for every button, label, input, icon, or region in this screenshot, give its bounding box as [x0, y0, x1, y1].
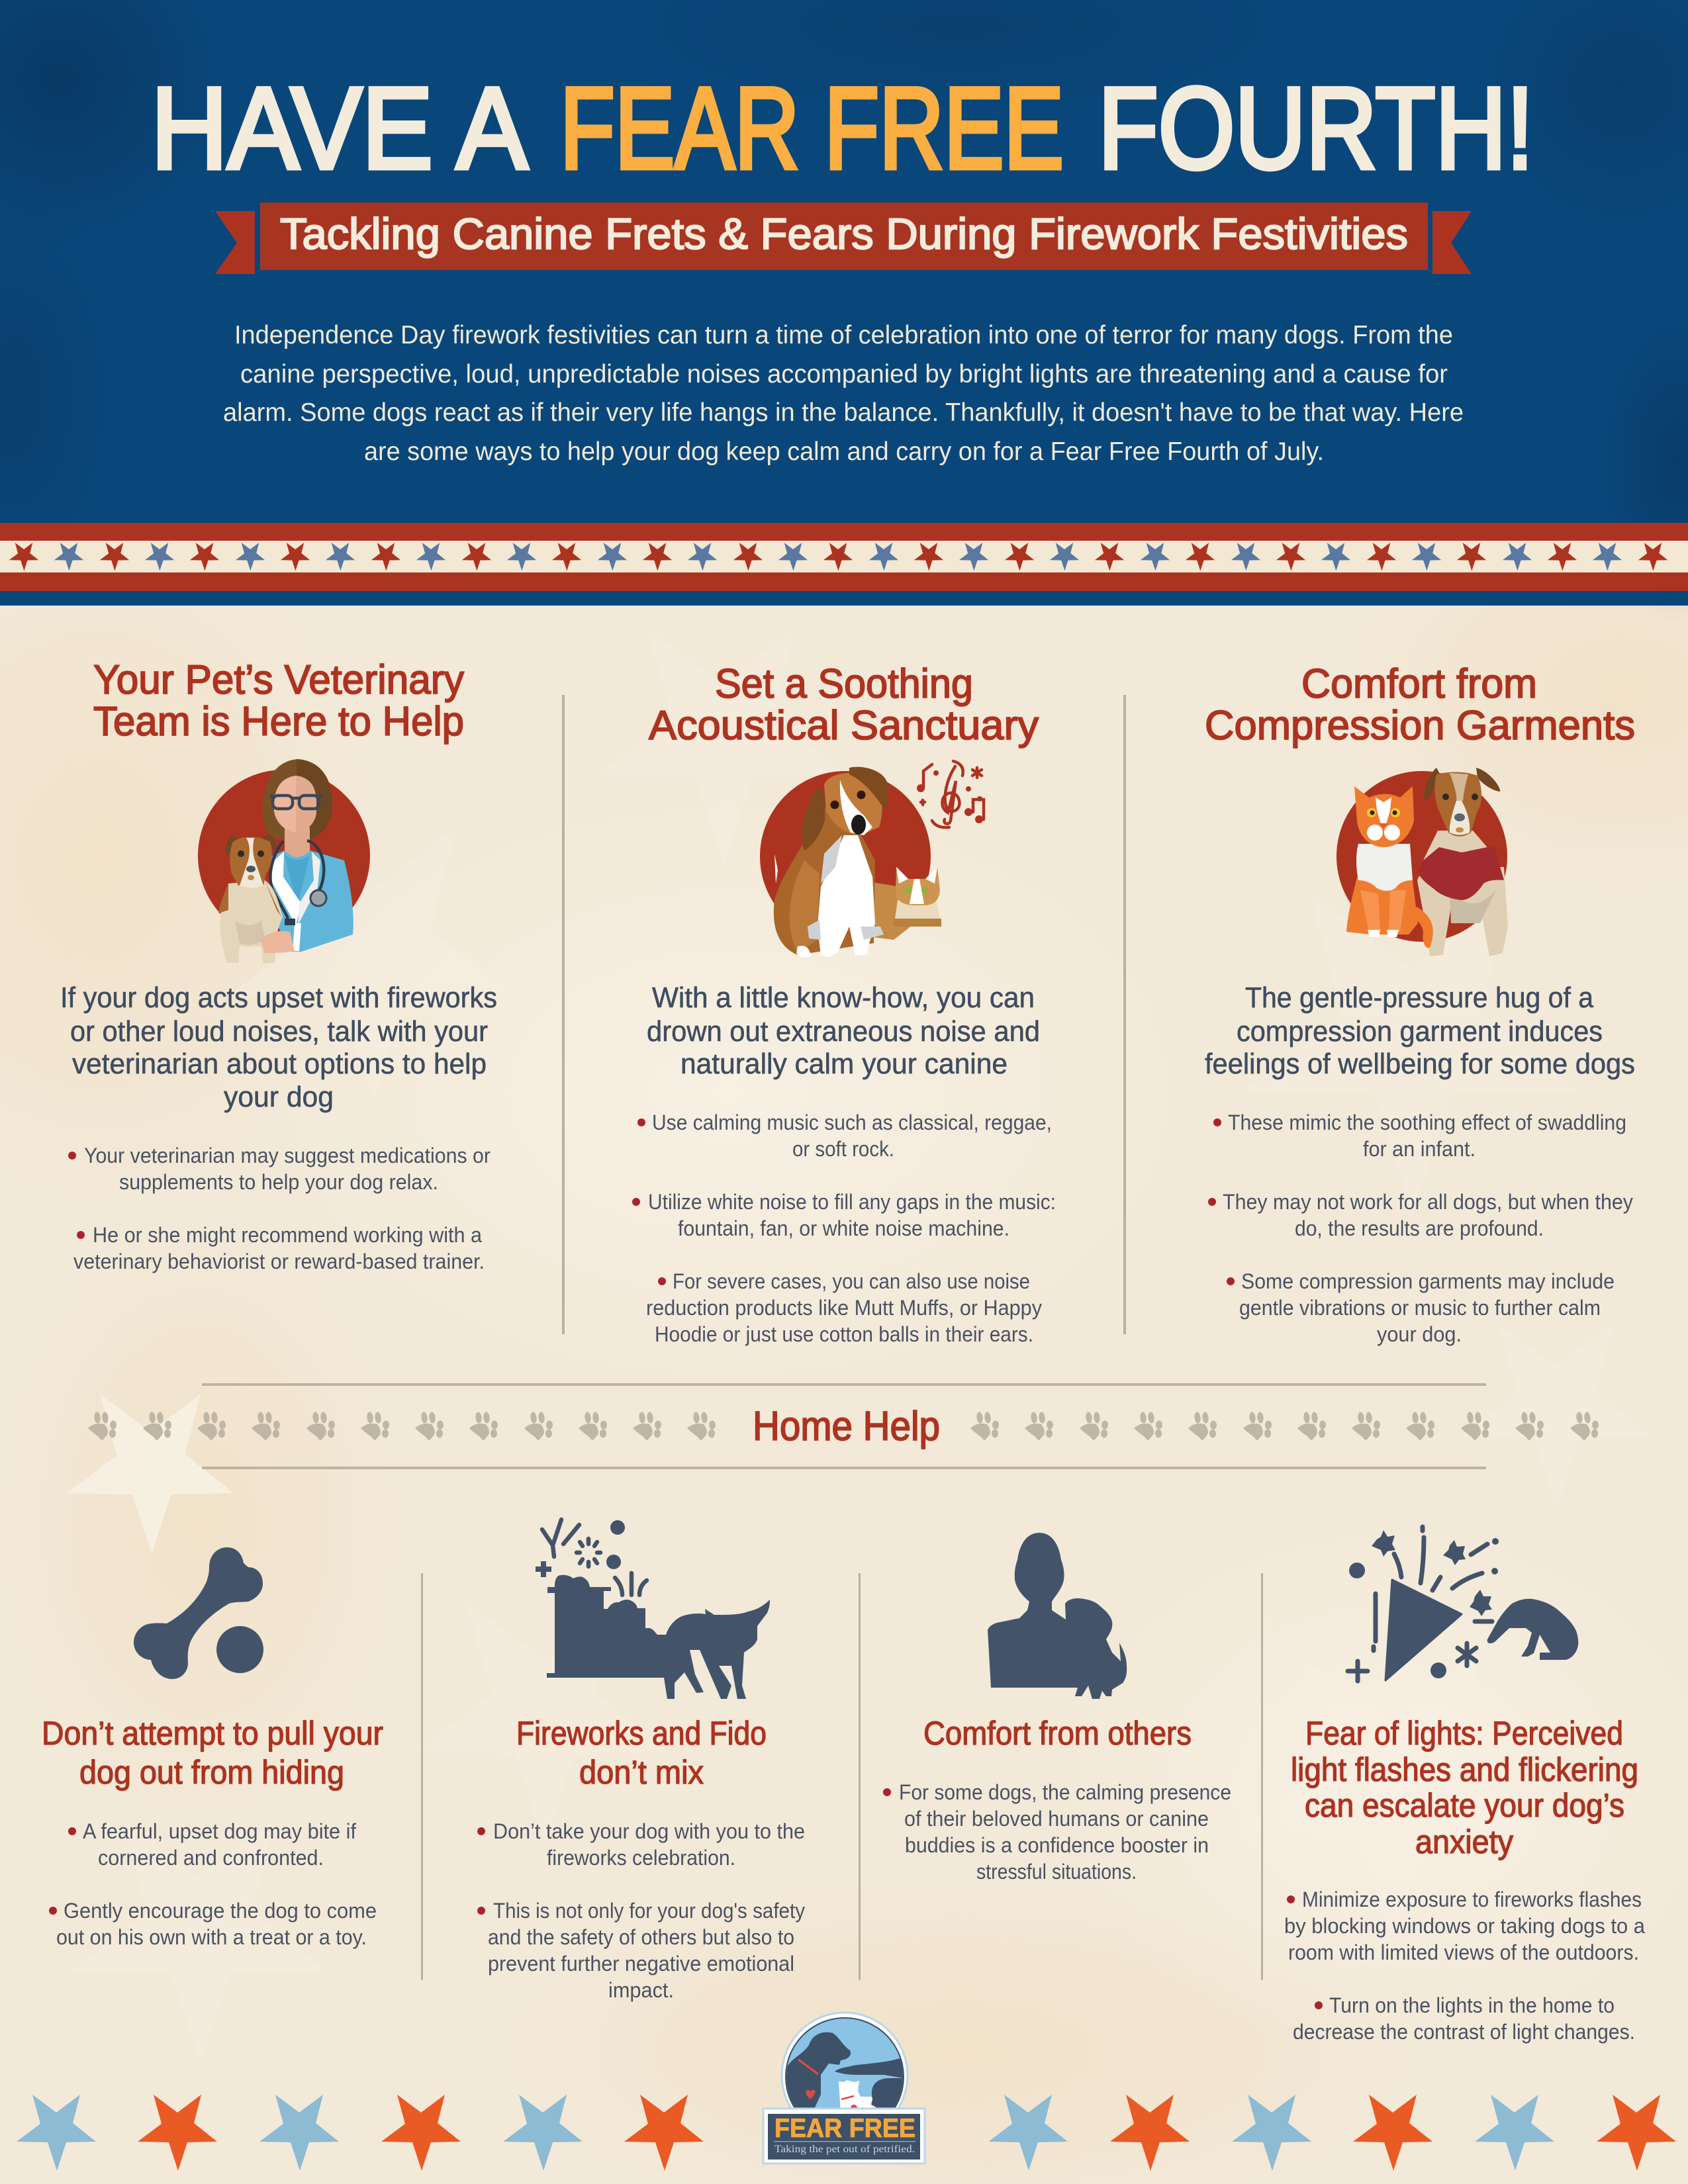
- bullet list: room with limited views of the outdoors.: [1288, 1940, 1639, 1964]
- heading: anxiety: [1415, 1823, 1513, 1860]
- bullet list: Minimize exposure to fireworks flashes: [1302, 1888, 1642, 1911]
- icon: party popper and crouching dog: [1348, 1527, 1578, 1681]
- bullet list: stressful situations.: [976, 1860, 1137, 1884]
- bullet list: [68, 1144, 491, 1273]
- bullet list: For some dogs, the calming presence: [899, 1780, 1231, 1804]
- subheading: The gentle-pressure hug of a: [1245, 981, 1593, 1014]
- bullet list: Turn on the lights in the home to: [1329, 1993, 1615, 2017]
- bullet list: A fearful, upset dog may bite if: [83, 1819, 356, 1843]
- divider: [859, 1573, 861, 1980]
- panel: comfort from others: [883, 1533, 1231, 1884]
- bullet list: veterinary behaviorist or reward-based trainer.: [73, 1250, 485, 1273]
- subtitle ribbon: Tackling Canine Frets & Fears During Firework Festivities: [280, 209, 1408, 258]
- divider: [1261, 1573, 1263, 1980]
- icon: fireworks and dog: [536, 1520, 770, 1699]
- bullet list: fireworks celebration.: [547, 1846, 735, 1870]
- heading: Team is Here to Help: [93, 699, 464, 745]
- divider: [1123, 695, 1126, 1334]
- heading: [649, 661, 1039, 749]
- bullet list: Gently encourage the dog to come: [64, 1899, 377, 1923]
- heading: Compression Garments: [1205, 703, 1635, 749]
- icon: person holding dog: [988, 1533, 1127, 1699]
- bullet list: buddies is a confidence booster in: [905, 1833, 1209, 1857]
- panel: acoustical sanctuary: [632, 661, 1056, 1346]
- title: FEAR FREE: [560, 64, 1064, 193]
- header background: [0, 0, 1688, 622]
- title: HAVE A: [151, 64, 528, 193]
- heading: [1205, 661, 1635, 749]
- bullet list: cornered and confronted.: [98, 1846, 324, 1870]
- paw prints left: [88, 1412, 716, 1440]
- subheading: your dog: [224, 1081, 334, 1113]
- bullet list: Use calming music such as classical, reggae,: [652, 1111, 1052, 1134]
- heading: [516, 1715, 767, 1791]
- heading: dog out from hiding: [79, 1754, 344, 1791]
- bullet list: impact.: [608, 1978, 674, 2002]
- subtitle ribbon: [215, 203, 1472, 274]
- heading: Set a Soothing: [715, 661, 973, 707]
- bullet list: He or she might recommend working with a: [93, 1223, 482, 1247]
- bullet list: by blocking windows or taking dogs to a: [1284, 1914, 1645, 1938]
- panel: hiding: [42, 1547, 383, 1949]
- heading: Acoustical Sanctuary: [649, 703, 1039, 749]
- bullet list: out on his own with a treat or a toy.: [56, 1925, 367, 1949]
- bullet list: [1284, 1888, 1645, 2044]
- heading: Don’t attempt to pull your: [42, 1715, 383, 1752]
- heading: [42, 1715, 383, 1791]
- logo: fear free: FEAR FREE: [774, 2114, 915, 2143]
- intro paragraph: alarm. Some dogs react as if their very life hangs in the balance. Thankfully, it doesn't have to be that way. Here: [223, 398, 1464, 427]
- bullet list: [632, 1111, 1056, 1346]
- subheading: or other loud noises, talk with your: [70, 1015, 488, 1048]
- panel: fear of lights: [1284, 1527, 1645, 2044]
- bullet list: Your veterinarian may suggest medications or: [84, 1144, 491, 1167]
- logo: fear free: Taking the pet out of petrified.: [774, 2144, 915, 2155]
- title: [151, 64, 1534, 193]
- heading: light flashes and flickering: [1291, 1751, 1638, 1788]
- subheading: If your dog acts upset with fireworks: [60, 981, 497, 1014]
- bullet list: reduction products like Mutt Muffs, or Happy: [646, 1296, 1042, 1320]
- panel: veterinary team: [60, 657, 497, 1273]
- subheading: naturally calm your canine: [680, 1048, 1008, 1080]
- heading: [93, 657, 464, 745]
- bullet list: [49, 1819, 377, 1949]
- section header: home help: [88, 1383, 1599, 1469]
- bullet list: Don’t take your dog with you to the: [493, 1819, 805, 1843]
- subheading: [1205, 981, 1635, 1080]
- bullet list: supplements to help your dog relax.: [119, 1170, 438, 1194]
- intro paragraph: canine perspective, loud, unpredictable noises accompanied by bright lights are threatening and a cause for: [240, 360, 1448, 388]
- bullet list: Hoodie or just use cotton balls in their ears.: [655, 1322, 1033, 1346]
- illustration: dog, cat and music: [760, 761, 984, 958]
- bullet list: gentle vibrations or music to further calm: [1239, 1296, 1601, 1320]
- bullet list: Utilize white noise to fill any gaps in the music:: [648, 1190, 1056, 1214]
- divider: [562, 695, 565, 1334]
- intro paragraph: Independence Day firework festivities can turn a time of celebration into one of terror for many dogs. From the: [234, 321, 1453, 349]
- subheading: feelings of wellbeing for some dogs: [1205, 1048, 1635, 1080]
- bullet list: fountain, fan, or white noise machine.: [678, 1216, 1009, 1240]
- bullet list: Some compression garments may include: [1241, 1269, 1615, 1293]
- illustration: cat and dog in garment: [1336, 768, 1508, 956]
- subheading: [647, 981, 1040, 1080]
- subheading: [60, 981, 497, 1113]
- bullet list: They may not work for all dogs, but when they: [1223, 1190, 1633, 1214]
- logo: fear free: [763, 2013, 925, 2163]
- heading: Comfort from others: [923, 1715, 1192, 1752]
- bullet list: of their beloved humans or canine: [904, 1807, 1209, 1831]
- subheading: drown out extraneous noise and: [647, 1015, 1040, 1048]
- heading: Home Help: [753, 1404, 940, 1449]
- bullet list: [883, 1780, 1231, 1884]
- heading: can escalate your dog’s: [1305, 1787, 1624, 1824]
- subheading: veterinarian about options to help: [72, 1048, 487, 1080]
- divider: [421, 1573, 423, 1980]
- paw prints right: [970, 1412, 1599, 1440]
- icon: bone and ball: [134, 1547, 263, 1679]
- bullet list: [1208, 1111, 1633, 1346]
- intro paragraph: are some ways to help your dog keep calm and carry on for a Fear Free Fourth of July.: [364, 437, 1324, 466]
- heading: don’t mix: [579, 1754, 704, 1791]
- bullet list: or soft rock.: [792, 1137, 894, 1161]
- subheading: With a little know-how, you can: [652, 981, 1035, 1014]
- title: FOURTH!: [1098, 64, 1534, 193]
- heading: Fireworks and Fido: [516, 1715, 767, 1752]
- panel: compression garments: [1205, 661, 1635, 1346]
- bullet list: your dog.: [1377, 1322, 1462, 1346]
- subheading: compression garment induces: [1237, 1015, 1603, 1048]
- bullet list: do, the results are profound.: [1295, 1216, 1544, 1240]
- illustration: vet with dog: [198, 759, 370, 963]
- heading: Your Pet’s Veterinary: [93, 657, 464, 703]
- bullet list: for an infant.: [1363, 1137, 1476, 1161]
- bullet list: prevent further negative emotional: [488, 1952, 794, 1976]
- footer stars: [17, 2095, 1676, 2171]
- bullet list: decrease the contrast of light changes.: [1293, 2020, 1635, 2044]
- heading: [1291, 1715, 1638, 1860]
- heading: Comfort from: [1301, 661, 1537, 707]
- panel: fireworks and fido: [477, 1520, 805, 2002]
- intro paragraph: [223, 321, 1464, 466]
- bullet list: [477, 1819, 805, 2002]
- bullet list: For severe cases, you can also use noise: [673, 1269, 1030, 1293]
- faint background stars: [67, 629, 1651, 2064]
- bullet list: This is not only for your dog's safety: [493, 1899, 805, 1923]
- heading: Fear of lights: Perceived: [1305, 1715, 1623, 1752]
- bullet list: and the safety of others but also to: [488, 1925, 794, 1949]
- star and stripe band: [0, 523, 1688, 591]
- bullet list: These mimic the soothing effect of swaddling: [1228, 1111, 1626, 1134]
